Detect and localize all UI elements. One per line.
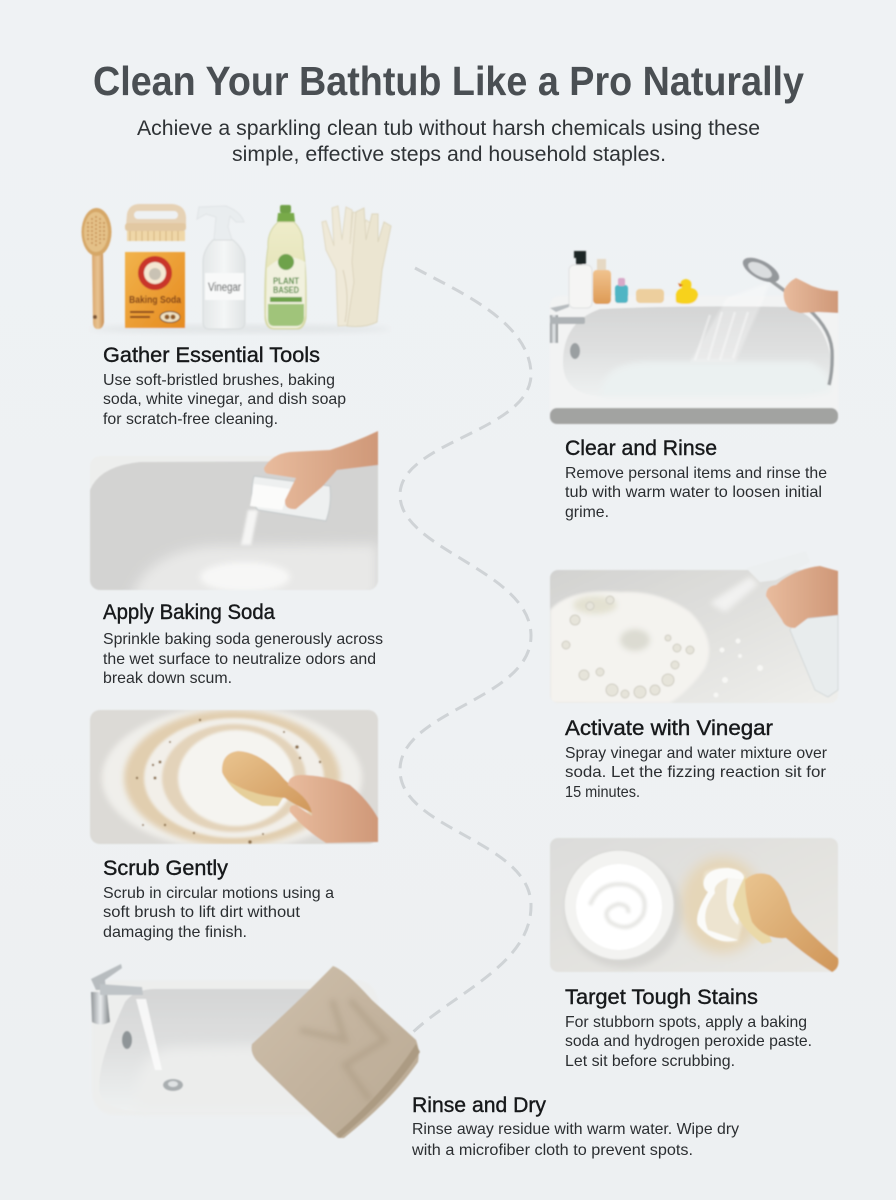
step: rinse and dry: Rinse and Dry [412, 1093, 546, 1117]
step: scrub gently: Scrub Gently [103, 856, 228, 880]
icon: faucet with running water [91, 964, 183, 1091]
icon: round hair brush [82, 208, 112, 329]
step: rinse and dry: Rinse away residue with warm water. Wipe dry [412, 1121, 739, 1138]
step: clear and rinse: grime. [565, 504, 609, 521]
icon: baking soda box [125, 252, 185, 328]
subtitle: simple, effective steps and household staples. [232, 143, 666, 166]
title: Clean Your Bathtub Like a Pro Naturally [93, 58, 804, 104]
step: scrub gently: soft brush to lift dirt without [103, 904, 301, 921]
icon: dish soap bottle [265, 205, 306, 329]
icon: dish soap bottle: PLANT [273, 276, 299, 286]
icon: dish soap bottle: BASED [273, 285, 299, 295]
step: apply baking soda: Sprinkle baking soda generously across [103, 631, 383, 648]
step: clear and rinse: Clear and Rinse [565, 436, 717, 460]
panel: apply baking soda image [90, 431, 378, 600]
icon: bowl of paste [564, 850, 682, 968]
step: target tough stains: For stubborn spots, apply a baking [565, 1014, 807, 1031]
step: target tough stains: Target Tough Stains [565, 985, 758, 1009]
step: gather essential tools: Gather Essential Tools [103, 343, 320, 367]
step: gather essential tools: soda, white vinegar, and dish soap [103, 391, 346, 408]
icon: vinegar spray bottle [197, 206, 245, 329]
subtitle: Achieve a sparkling clean tub without harsh chemicals using these [137, 117, 760, 140]
step: gather essential tools [103, 343, 346, 428]
step: scrub gently: damaging the finish. [103, 924, 247, 941]
panel: activate with vinegar image [550, 551, 838, 703]
step: apply baking soda: break down scum. [103, 670, 232, 687]
step: activate with vinegar: Activate with Vinegar [565, 716, 773, 740]
step: clear and rinse [565, 436, 827, 521]
step: scrub gently: Scrub in circular motions using a [103, 885, 334, 902]
step: target tough stains: Let sit before scrubbing. [565, 1053, 735, 1070]
step: rinse and dry: with a microfiber cloth to prevent spots. [411, 1142, 693, 1159]
icon: faucet [550, 304, 585, 359]
icon: vinegar spray bottle: Vinegar [208, 282, 241, 294]
step: gather essential tools: Use soft-bristled brushes, baking [103, 372, 335, 389]
step: activate with vinegar: 15 minutes. [565, 784, 640, 801]
step: target tough stains: soda and hydrogen peroxide paste. [565, 1033, 812, 1050]
panel: rinse and dry image [91, 964, 420, 1138]
step: activate with vinegar: soda. Let the fizzing reaction sit for [565, 764, 827, 781]
subtitle [137, 117, 760, 166]
icon: spray bottle and hand [710, 551, 838, 697]
icon: bath products [569, 251, 698, 308]
icon: hand with shower head [739, 253, 838, 385]
icon: wooden brush [733, 873, 838, 972]
icon: microfiber towel [252, 966, 420, 1138]
panel: clear and rinse image [550, 251, 838, 424]
icon: scrub brush [125, 204, 186, 241]
icon: hand pouring from jar [250, 431, 378, 521]
step: target tough stains [565, 985, 812, 1070]
step: activate with vinegar [565, 716, 828, 801]
step: apply baking soda: the wet surface to neutralize odors and [103, 651, 376, 668]
step: apply baking soda [103, 600, 383, 687]
panel: target tough stains image [550, 838, 838, 972]
icon: wooden brush with hand [222, 751, 378, 843]
icon: baking soda box: Baking Soda [129, 294, 181, 306]
icon: rubber gloves [322, 206, 391, 326]
step: activate with vinegar: Spray vinegar and water mixture over [565, 745, 828, 762]
step: gather essential tools: for scratch-free cleaning. [103, 411, 278, 428]
step: clear and rinse: tub with warm water to loosen initial [565, 484, 822, 501]
step: clear and rinse: Remove personal items and rinse the [565, 465, 827, 482]
step: rinse and dry [411, 1093, 739, 1159]
dashed connector path [400, 268, 531, 1035]
tub body [550, 282, 838, 424]
panel: gather essential tools image [82, 204, 391, 333]
step: scrub gently [103, 856, 334, 941]
step: apply baking soda: Apply Baking Soda [103, 600, 275, 624]
panel: scrub gently image [90, 706, 378, 850]
